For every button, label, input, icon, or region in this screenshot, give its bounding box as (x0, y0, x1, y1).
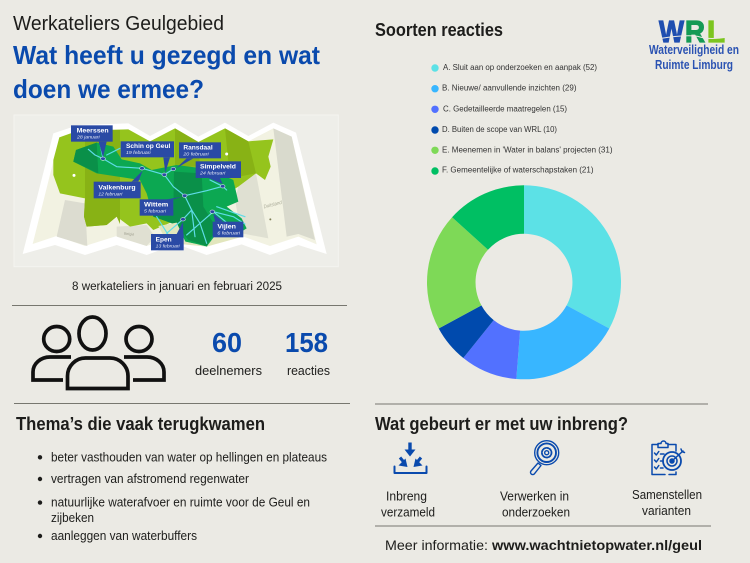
location labels: 13 februari (156, 243, 181, 249)
map place names: België (124, 232, 134, 237)
label: compose variants (632, 488, 702, 518)
chart legend (431, 63, 613, 175)
stat: reactions: reacties (287, 364, 330, 378)
location labels: 12 februari (98, 191, 123, 197)
location labels: Schin op Geul (126, 143, 170, 150)
themes list: natuurlijke waterafvoer en ruimte voor de Geul en (51, 496, 310, 510)
title: doen we ermee? (13, 74, 204, 104)
location labels: 24 februari (199, 171, 226, 177)
location labels: 19 februari (126, 150, 152, 156)
location labels: Simpelveld (200, 164, 236, 171)
icon: group of people (33, 317, 164, 388)
label: collect input: Inbreng (386, 490, 427, 504)
more information link: www.wachtnietopwater.nl/geul (491, 537, 702, 553)
chart legend: F. Gemeentelijke of waterschapstaken (21) (442, 166, 594, 175)
label: collect input: verzameld (381, 506, 435, 520)
themes list: beter vasthouden van water op hellingen en plateaus (51, 450, 327, 464)
location labels: 28 januari (76, 134, 101, 140)
stat: participants (195, 327, 262, 378)
location labels: Vijlen (217, 224, 236, 231)
dark green catchment (73, 143, 247, 247)
more information link (385, 537, 702, 553)
donut chart (427, 185, 621, 379)
heading: reaction types: Soorten reacties (375, 20, 503, 40)
logo: WRL: L (707, 14, 725, 49)
map place names: Duitsland (263, 200, 283, 210)
location labels (71, 125, 243, 250)
location labels: Wittem (144, 202, 168, 209)
logo: WRL: R (685, 14, 705, 49)
label: process: onderzoeken (502, 506, 570, 520)
label pointers (99, 142, 223, 234)
chart legend: C. Gedetailleerde maatregelen (15) (443, 104, 567, 113)
title: Wat heeft u gezegd en wat (13, 40, 320, 70)
icon: clipboard with target (652, 441, 684, 474)
stat: participants: 60 (212, 327, 242, 358)
label: compose variants: Samenstellen (632, 488, 702, 502)
label: process (500, 490, 570, 520)
chart legend: E. Meenemen in 'Water in balans' projecten (31) (442, 145, 613, 154)
location labels: Ransdaal (183, 144, 213, 151)
location labels: 20 februari (182, 151, 210, 157)
chart legend: A. Sluit aan op onderzoeken en aanpak (52) (443, 63, 597, 72)
heading: what happens: Wat gebeurt er met uw inbreng? (375, 414, 628, 434)
map caption: 8 werkateliers in januari en februari 2025 (72, 281, 282, 293)
location labels: 5 februari (144, 209, 167, 215)
label: collect input (381, 490, 435, 520)
rivers (88, 143, 245, 243)
themes list: zijbeken (51, 511, 94, 525)
chart legend: D. Buiten de scope van WRL (10) (442, 125, 557, 134)
stat: reactions (285, 327, 330, 378)
stat: participants: deelnemers (195, 364, 262, 378)
map place names (72, 152, 283, 237)
icon: collect input (394, 442, 426, 473)
map of workshop locations (14, 115, 338, 267)
heading: themes: Thema’s die vaak terugkwamen (16, 414, 265, 434)
stat: reactions: 158 (285, 327, 328, 358)
logo: WRL (649, 14, 739, 72)
map markers (101, 157, 225, 221)
themes list: aanleggen van waterbuffers (51, 529, 197, 543)
label: process: Verwerken in (500, 490, 569, 504)
title (13, 13, 320, 104)
logo: WRL: W (659, 14, 685, 49)
label: compose variants: varianten (642, 504, 691, 518)
location labels: 6 februari (217, 230, 241, 236)
location labels: Meerssen (77, 127, 109, 134)
more information link: Meer informatie: (385, 537, 488, 553)
themes list: vertragen van afstromend regenwater (51, 472, 249, 486)
location labels: Epen (156, 237, 172, 244)
chart legend: B. Nieuwe/ aanvullende inzichten (29) (442, 84, 577, 93)
icon: magnifier with gear (530, 441, 559, 475)
title: Werkateliers Geulgebied (13, 13, 224, 35)
themes list (38, 450, 327, 543)
location labels: Valkenburg (98, 184, 136, 191)
light green region (53, 128, 273, 230)
logo: WRL: Ruimte Limburg (655, 58, 733, 72)
